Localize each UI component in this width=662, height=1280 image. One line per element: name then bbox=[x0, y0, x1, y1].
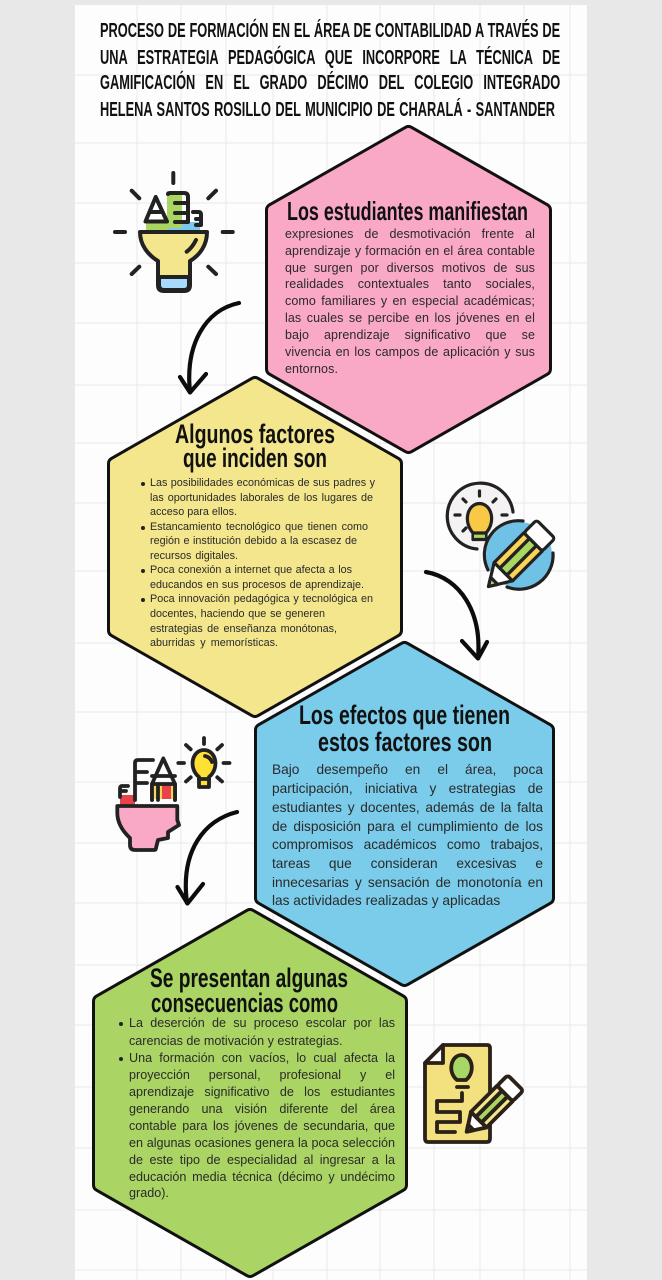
text block: green panel bullet list: carencias de motivación y estrategias. bbox=[129, 1034, 342, 1048]
text block: green panel bullet list: grado). bbox=[129, 1186, 169, 1200]
text block: yellow panel bullet list: educandos en sus procesos de aprendizaje. bbox=[150, 579, 364, 591]
heading: green panel bbox=[150, 963, 348, 1018]
panel: yellow hexagon bbox=[114, 384, 396, 710]
title: PROCESO DE FORMACIÓN EN EL ÁREA DE CONTABILIDAD A TRAVÉS DE bbox=[100, 20, 560, 42]
text block: pink panel: realidades contextuales tanto sociales, bbox=[285, 277, 535, 291]
icon: head with pencil and lightbulb bbox=[117, 738, 230, 850]
text block: pink panel: bajo aprendizaje significativo que se bbox=[285, 328, 535, 342]
text block: blue panel: las actividades realizadas y aplicadas bbox=[272, 893, 500, 908]
text block: blue panel: innecesarias y sensación de monotonía en bbox=[272, 875, 543, 890]
heading: yellow panel: que inciden son bbox=[183, 443, 327, 473]
arrow: blue to green bbox=[178, 812, 237, 904]
text block: pink panel: entornos. bbox=[285, 362, 338, 376]
text block: pink panel: aprendizaje y formación en el área contable bbox=[285, 244, 535, 258]
text block: yellow panel bullet list: Poca conexión a internet que afecta a los bbox=[150, 564, 352, 576]
icon: document with lightbulb and pencil bbox=[425, 1045, 523, 1142]
text block: pink panel bbox=[285, 227, 535, 376]
heading: blue panel bbox=[299, 700, 510, 757]
text block: yellow panel bullet list: recursos digitales. bbox=[150, 550, 238, 562]
text block: green panel bullet list: aprendizaje significativo de los estudiantes bbox=[129, 1085, 395, 1099]
arrow: yellow to blue bbox=[426, 572, 487, 658]
panel: blue hexagon bbox=[262, 648, 548, 980]
heading: green panel: Se presentan algunas bbox=[150, 963, 348, 993]
text block: blue panel: tareas que consideran excesivas e bbox=[272, 856, 543, 871]
text block: yellow panel bullet list: acceso para ellos. bbox=[150, 506, 237, 518]
icon: lightbulb and pencil bbox=[445, 482, 555, 596]
text block: yellow panel bullet list: estrategias de enseñanza monótonas, bbox=[150, 623, 337, 635]
text block: green panel bullet list: La deserción de su proceso escolar por las bbox=[129, 1016, 395, 1030]
text block: yellow panel bullet list: Poca innovación pedagógica y tecnológica en bbox=[150, 593, 373, 605]
heading: pink panel: Los estudiantes manifiestan bbox=[287, 196, 528, 226]
text block: yellow panel bullet list: Estancamiento tecnológico que tienen como bbox=[150, 521, 368, 533]
text block: blue panel: participación, iniciativa y estrategias de bbox=[272, 781, 543, 796]
text block: blue panel: estudiantes y docentes, además de la falta bbox=[272, 800, 543, 815]
text block: yellow panel bullet list: docentes, haciendo que se generen bbox=[150, 608, 325, 620]
text block: green panel bullet list: proyección personal, profesional y el bbox=[129, 1068, 395, 1082]
text block: pink panel: como familiares y en especial académicas; bbox=[285, 294, 535, 308]
text block: yellow panel bullet list: región e institución debido a la escasez de bbox=[150, 535, 357, 547]
text block: yellow panel bullet list bbox=[141, 477, 375, 649]
heading: blue panel: estos factores son bbox=[318, 727, 492, 757]
text block: green panel bullet list: generando una visión diferente del área bbox=[129, 1102, 395, 1116]
title: GAMIFICACIÓN EN EL GRADO DÉCIMO DEL COLEGIO INTEGRADO bbox=[100, 72, 560, 94]
title bbox=[100, 18, 560, 120]
text block: blue panel: compromisos académicos como trabajos, bbox=[272, 837, 543, 852]
panel: pink hexagon bbox=[272, 132, 544, 446]
text block: pink panel: expresiones de desmotivación frente al bbox=[285, 227, 535, 241]
heading: green panel: consecuencias como bbox=[151, 988, 338, 1018]
text block: green panel bullet list: de este tipo de especialidad al ingresar a la bbox=[129, 1153, 395, 1167]
text block: green panel bullet list bbox=[119, 1016, 395, 1200]
panel: green hexagon bbox=[100, 916, 400, 1270]
text block: yellow panel bullet list: Las posibilidades económicas de sus padres y bbox=[150, 477, 375, 489]
text block: green panel bullet list: Una formación con vacíos, lo cual afecta la bbox=[129, 1051, 395, 1065]
text block: blue panel: de disposición para el cumplimiento de los bbox=[272, 819, 543, 834]
title: HELENA SANTOS ROSILLO DEL MUNICIPIO DE CHARALÁ - SANTANDER bbox=[100, 98, 555, 120]
text block: blue panel bbox=[272, 762, 543, 908]
heading: yellow panel bbox=[175, 419, 335, 473]
text block: blue panel: Bajo desempeño en el área, poca bbox=[272, 762, 543, 777]
text block: yellow panel bullet list: aburridas y memorísticas. bbox=[150, 637, 278, 649]
text block: pink panel: vivencia en los campos de aplicación y sus bbox=[285, 345, 535, 359]
text block: pink panel: que surgen por diversos motivos de sus bbox=[285, 261, 535, 275]
text block: pink panel: las cuales se percibe en los jóvenes en el bbox=[285, 311, 535, 325]
title: UNA ESTRATEGIA PEDAGÓGICA QUE INCORPORE LA TÉCNICA DE bbox=[100, 46, 560, 68]
text block: green panel bullet list: en algunas ocasiones genera la poca selección bbox=[129, 1136, 395, 1150]
icon: funnel lightbulb with pencils bbox=[115, 173, 233, 291]
arrow: pink to yellow bbox=[180, 303, 239, 392]
heading: blue panel: Los efectos que tienen bbox=[299, 700, 510, 730]
text block: green panel bullet list: contable para los jóvenes de secundaria, que bbox=[129, 1119, 395, 1133]
text block: yellow panel bullet list: las oportunidades laborales de los lugares de bbox=[150, 492, 373, 504]
heading: yellow panel: Algunos factores bbox=[175, 419, 335, 449]
text block: green panel bullet list: educación media técnica (décimo y undécimo bbox=[129, 1170, 395, 1184]
